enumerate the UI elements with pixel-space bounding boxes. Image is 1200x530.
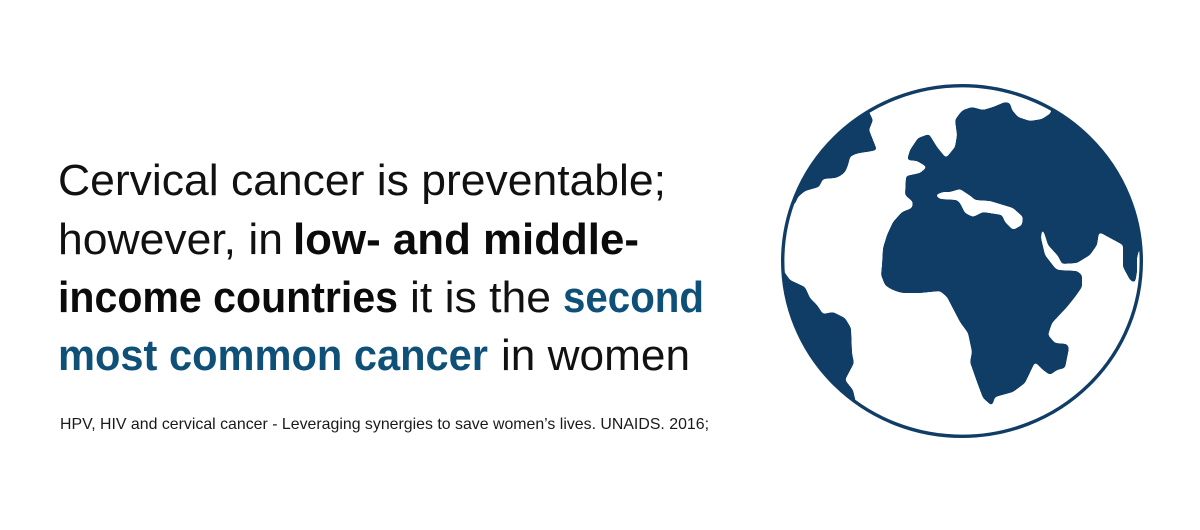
headline text: most common cancer	[58, 331, 488, 380]
headline text: it is the	[410, 273, 551, 322]
globe background	[783, 86, 1141, 436]
headline text: low- and middle-	[293, 215, 639, 264]
headline text: Cervical cancer is preventable;	[58, 156, 666, 205]
headline text: income countries	[58, 273, 398, 322]
globe outline	[783, 86, 1141, 436]
source citation: HPV, HIV and cervical cancer - Leveraging synergies to save women’s lives. UNAIDS. 2016;	[60, 416, 709, 433]
headline text	[58, 156, 704, 380]
landmass: South America	[784, 272, 856, 400]
icon: globe	[781, 84, 1143, 438]
landmasses	[784, 102, 1140, 404]
headline text: second	[563, 273, 704, 322]
headline text: however, in	[58, 215, 283, 264]
headline text: in women	[501, 331, 690, 380]
landmass: North America	[794, 112, 876, 204]
landmass: Eurasia and Africa	[881, 102, 1140, 404]
